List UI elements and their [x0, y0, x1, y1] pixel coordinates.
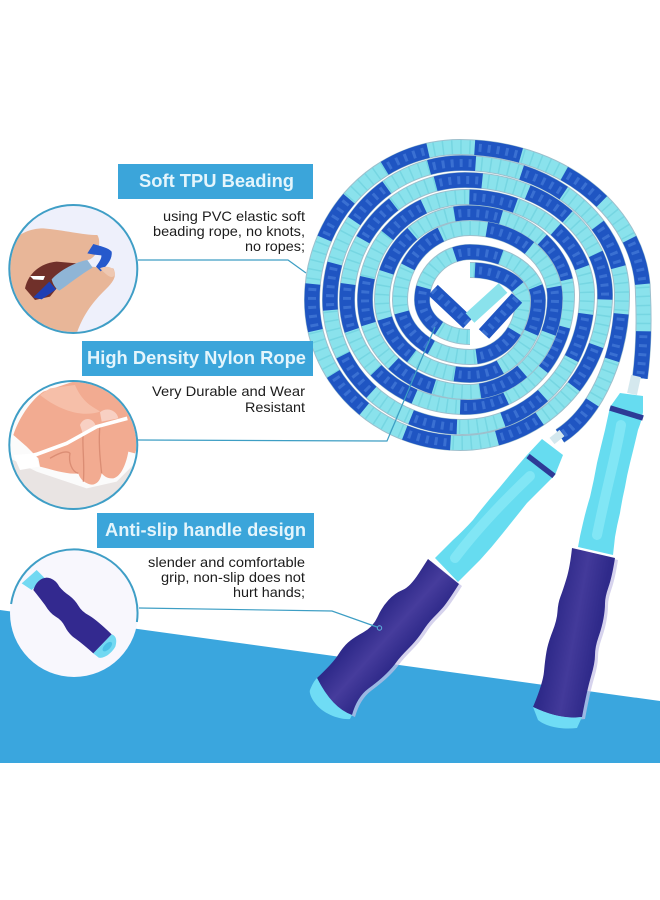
panel: soft TPU beading — [7, 164, 313, 333]
cyan shaft — [435, 439, 563, 582]
panel: high density nylon rope — [9, 327, 435, 509]
description: soft TPU beading — [153, 208, 305, 254]
heading: soft TPU beading: Soft TPU Beading — [139, 171, 294, 191]
navy band — [528, 456, 554, 476]
strand two beads — [330, 163, 622, 436]
photo circle: fingers holding white rope — [9, 381, 140, 509]
photo circle: grip close-up — [10, 549, 138, 677]
leader line: handle — [139, 608, 382, 630]
description: anti-slip handle: hurt hands; — [233, 584, 305, 600]
photo circle: fingers pinching beads — [7, 205, 137, 333]
description: soft TPU beading: using PVC elastic soft — [163, 208, 305, 224]
clear tube — [632, 376, 636, 394]
description: nylon rope — [152, 383, 305, 415]
right handle — [533, 376, 643, 729]
heading: anti-slip handle — [97, 513, 314, 548]
purple grip — [533, 548, 615, 718]
panel: anti-slip handle design — [10, 513, 382, 677]
infographic canvas — [0, 139, 660, 763]
cyan end cap — [533, 707, 582, 729]
cyan shaft — [578, 393, 643, 555]
heading: high density nylon rope — [82, 341, 313, 376]
grip shadow — [536, 550, 618, 720]
heading: anti-slip handle: Anti-slip handle design — [105, 520, 306, 540]
description: soft TPU beading: beading rope, no knots, — [153, 223, 305, 239]
description: anti-slip handle: grip, non-slip does not — [161, 569, 305, 585]
circle outline (upper arc) — [11, 549, 138, 622]
clear tube — [552, 433, 562, 441]
leader line: beading — [138, 260, 306, 273]
cyan end cap — [310, 678, 352, 719]
jump rope coil — [312, 147, 644, 443]
description: nylon rope: Resistant — [245, 399, 305, 415]
left handle — [310, 433, 563, 719]
description: anti-slip handle — [148, 554, 305, 600]
leader line: nylon rope — [138, 327, 435, 441]
strand one beads — [312, 147, 644, 443]
blue diagonal background band — [0, 610, 660, 763]
purple grip — [317, 559, 459, 715]
centre beads — [433, 288, 517, 334]
description: soft TPU beading: no ropes; — [245, 238, 305, 254]
heading: soft TPU beading — [118, 164, 313, 199]
description: nylon rope: Very Durable and Wear — [152, 383, 305, 399]
heading: high density nylon rope: High Density Nylon Rope — [87, 348, 306, 368]
grip shadow — [320, 561, 462, 717]
navy band — [610, 408, 643, 418]
description: anti-slip handle: slender and comfortable — [148, 554, 305, 570]
